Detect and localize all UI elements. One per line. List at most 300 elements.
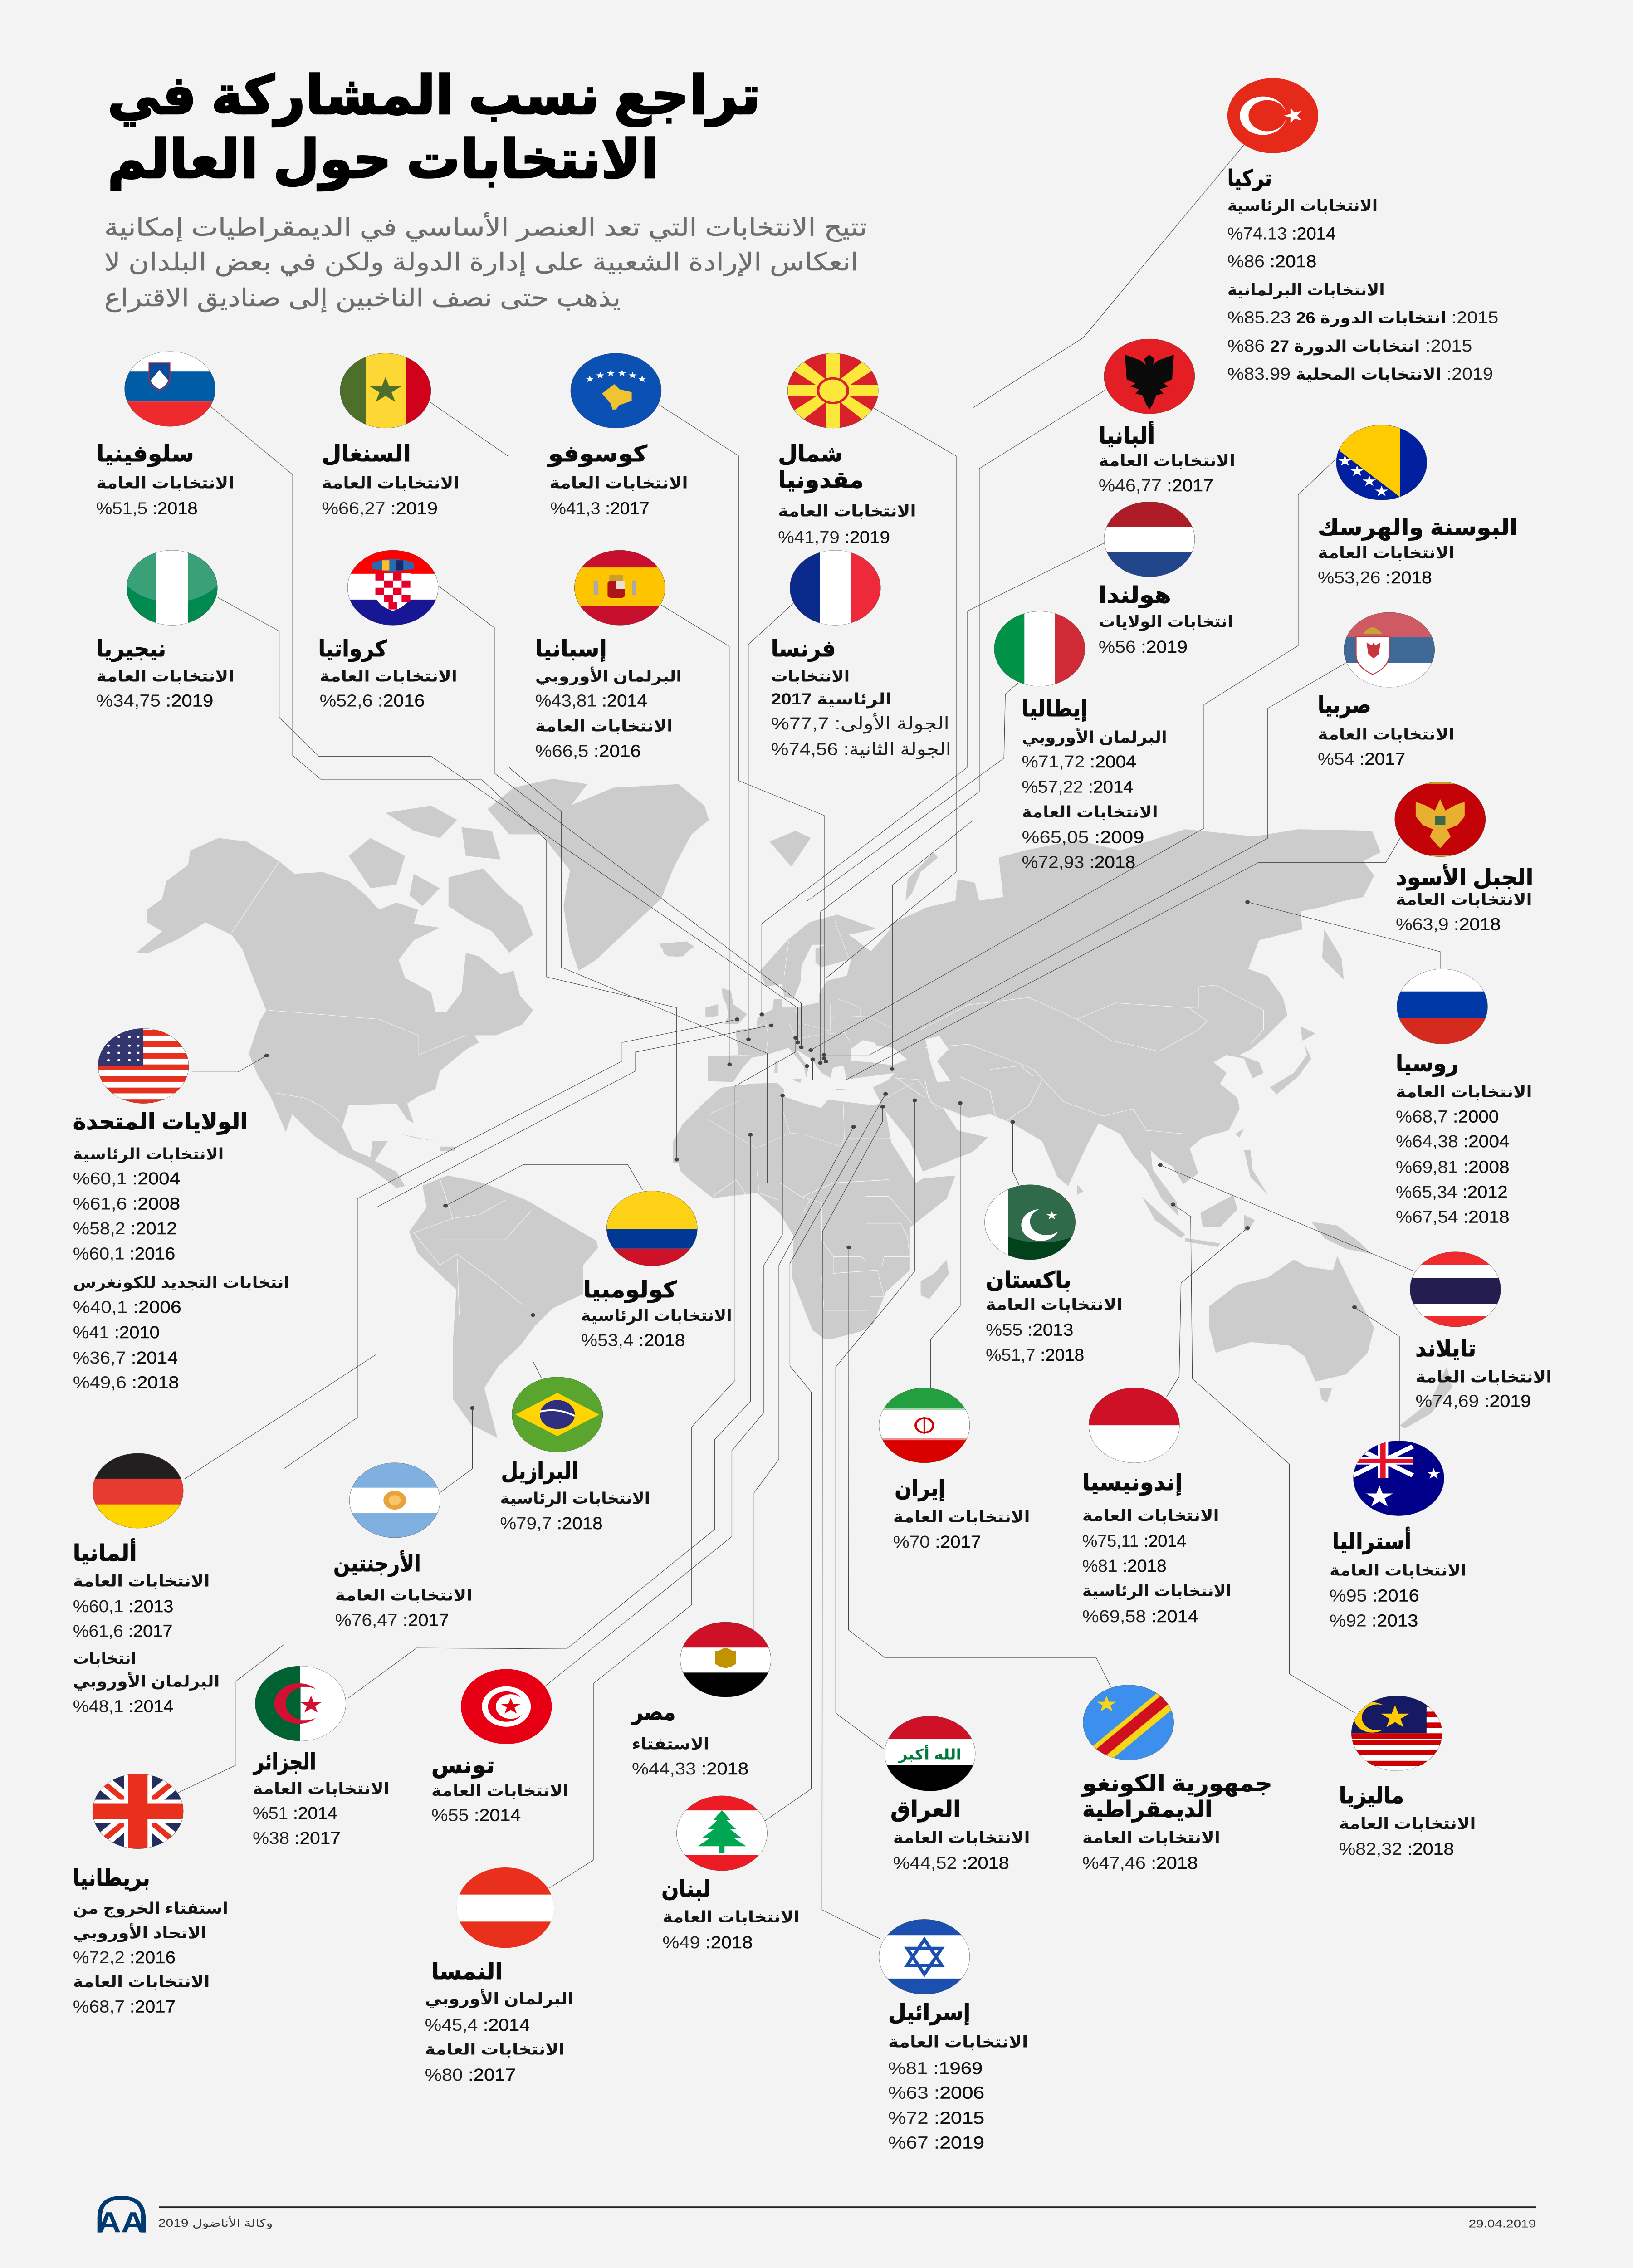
figures: 2009: %65,05 <box>1022 827 1144 846</box>
figures <box>1099 613 1233 656</box>
figures: 2008: %61,6 <box>73 1194 180 1213</box>
name: كرواتيا <box>318 636 387 662</box>
figures: 2018: %79,7 <box>500 1514 603 1533</box>
figures: الانتخابات العامة <box>253 1780 390 1798</box>
name <box>778 441 864 493</box>
country: United States <box>73 1028 289 1392</box>
name: هولندا <box>1099 582 1171 608</box>
name: الجبل الأسود <box>1396 864 1533 890</box>
leader: Montenegro <box>813 838 1400 1080</box>
figures: 2016: %72,2 <box>73 1948 176 1967</box>
country: Russia <box>1396 969 1532 1227</box>
intro text: يذهب حتى نصف الناخبين إلى صناديق الاقتراع <box>104 284 621 312</box>
figures: الجولة الأولى: ‎%77,7 <box>771 713 949 734</box>
figures: انتخابات الولايات <box>1099 613 1233 631</box>
figures <box>1099 452 1235 495</box>
flag: Australia <box>1353 1441 1444 1516</box>
name: ألمانيا <box>73 1538 137 1565</box>
figures: 2018: %47,46 <box>1082 1853 1198 1872</box>
figures: 2013: %92 <box>1330 1611 1418 1630</box>
figures: 2016: %95 <box>1330 1586 1419 1605</box>
figures: 2018: %81 <box>1082 1556 1167 1575</box>
figures: الانتخابات الرئاسية <box>500 1490 650 1508</box>
name: الولايات المتحدة <box>73 1109 248 1135</box>
flag: Egypt <box>680 1622 771 1699</box>
footer rule <box>159 2206 1536 2208</box>
leader: Netherlands <box>762 543 1104 1014</box>
figures <box>1227 197 1498 383</box>
figures: 2012: %65,34 <box>1396 1182 1508 1202</box>
figures: الانتخابات العامة <box>335 1587 472 1604</box>
country: DR Congo <box>1081 1685 1272 1872</box>
figures: 2018: %53,26 <box>1318 568 1432 587</box>
country: Tunisia <box>431 1669 569 1825</box>
figures: الانتخابات العامة <box>96 668 234 685</box>
figures: الانتخابات العامة <box>322 474 460 492</box>
figures: 2014: %45,4 <box>425 2015 530 2034</box>
name: البرازيل <box>501 1458 578 1484</box>
country: Pakistan <box>981 1173 1123 1364</box>
country: Netherlands <box>1099 502 1233 656</box>
figures <box>73 1573 220 1716</box>
figures: 2006: %40,1 <box>73 1297 181 1316</box>
name: أستراليا <box>1332 1526 1411 1554</box>
figures: الانتخابات البرلمانية <box>1227 281 1385 299</box>
flag: Pakistan <box>981 1173 1100 1260</box>
leader: Slovenia <box>210 406 676 1159</box>
figures: 2018: %67,54 <box>1396 1207 1509 1227</box>
flag: Iraq <box>885 1716 975 1791</box>
figures <box>500 1490 650 1533</box>
figures: 2014: %57,22 <box>1022 777 1133 797</box>
country: Iraq <box>885 1716 1030 1872</box>
figures: 2014: %69,58 <box>1082 1607 1198 1626</box>
figures: 2014: %74.13 <box>1227 224 1336 243</box>
figures: 2018: %49,6 <box>73 1373 179 1392</box>
leader: Iran <box>931 1103 960 1388</box>
figures: الانتخابات الرئاسية <box>1082 1582 1232 1600</box>
figures: الانتخابات الرئاسية <box>1227 197 1378 215</box>
flag: Argentina <box>349 1463 440 1538</box>
name <box>1081 1770 1272 1822</box>
figures: 2019: %74,69 <box>1416 1391 1531 1411</box>
figures: 2018: %44,33 <box>632 1759 748 1778</box>
name: سلوفينيا <box>96 441 194 467</box>
figures: 2019: %66,27 <box>322 499 438 518</box>
date: 29.04.2019 <box>1469 2218 1536 2230</box>
figures <box>431 1782 569 1825</box>
name: الجزائر <box>253 1749 316 1775</box>
figures: 2017: %46,77 <box>1099 476 1213 495</box>
leader: Tunisia <box>544 1095 782 1687</box>
figures: 2019: %41,79 <box>778 528 890 547</box>
leader: Albania <box>821 390 1106 1063</box>
flag: Serbia <box>1344 612 1435 689</box>
leader: Brazil <box>533 1315 542 1378</box>
logo: Anadolu Agency: AA <box>97 2206 145 2239</box>
figures <box>253 1780 390 1848</box>
leader: Iraq <box>836 1100 914 1749</box>
name: بريطانيا <box>73 1865 150 1891</box>
figures: 2017: %68,7 <box>73 1997 176 2016</box>
figures: 2004: %60,1 <box>73 1169 180 1188</box>
leader: Serbia <box>824 662 1347 1055</box>
flag: Montenegro <box>1395 782 1486 857</box>
figures: 2014: %51 <box>253 1804 337 1823</box>
flag: Indonesia <box>1089 1388 1180 1463</box>
country: Israel <box>879 1919 1028 2152</box>
leader: Germany <box>185 1025 771 1479</box>
figures: الانتخابات العامة <box>73 1573 210 1590</box>
figures <box>771 668 951 759</box>
figures <box>1416 1369 1552 1411</box>
leader: Spain <box>661 605 729 1065</box>
name: إيطاليا <box>1022 696 1088 722</box>
country: Croatia <box>318 550 457 710</box>
leader: Turkey <box>892 145 1244 1069</box>
figures: 2008: %69,81 <box>1396 1157 1509 1177</box>
figures: الانتخابات العامة <box>1082 1507 1219 1525</box>
leader: Argentina <box>440 1408 472 1492</box>
leader: Senegal <box>430 402 768 1183</box>
country: Bosnia and Herzegovina <box>1318 419 1518 587</box>
figures: الانتخابات العامة <box>535 718 673 735</box>
leader: Australia <box>1354 1307 1399 1441</box>
figures: الانتخابات الرئاسية <box>581 1307 732 1325</box>
country: Turkey <box>1227 78 1498 383</box>
name: إسرائيل <box>888 1999 970 2026</box>
figures <box>335 1587 472 1630</box>
figures <box>1339 1815 1476 1858</box>
figures: الجولة الثانية: ‎%74,56 <box>771 739 951 759</box>
figures: 2019: %56 <box>1099 637 1188 656</box>
leader: North Macedonia <box>826 408 956 1061</box>
flag: Algeria <box>255 1666 347 1741</box>
country: France <box>771 550 951 759</box>
figures: 2016: %60,1 <box>73 1244 175 1263</box>
leader: Indonesia <box>1167 1228 1247 1397</box>
figures: الانتخابات العامة <box>888 2033 1028 2051</box>
figures: 2014: %36,7 <box>73 1348 178 1367</box>
figures: الاتحاد الأوروبي <box>73 1923 207 1942</box>
leader: France <box>748 603 793 1040</box>
figures: 2012: %58,2 <box>73 1219 177 1238</box>
figures <box>549 474 688 518</box>
figures: 2018: %63,9 <box>1396 914 1501 934</box>
figures: 2018: %72,93 <box>1022 852 1135 872</box>
figures: انتخابات التجديد للكونغرس <box>73 1274 289 1292</box>
figures <box>986 1296 1123 1364</box>
name: باكستان <box>986 1267 1071 1292</box>
country: Serbia <box>1318 612 1454 768</box>
leader: Lebanon <box>765 1094 885 1821</box>
flag: Israel <box>879 1919 970 1994</box>
figures: 2018: %49 <box>662 1933 753 1952</box>
figures: الانتخابات العامة <box>1022 803 1158 821</box>
leader: Russia <box>1247 902 1440 969</box>
agency credit: وكالة الأناضول 2019 <box>158 2216 273 2229</box>
leader: Israel <box>822 1107 883 1939</box>
country: Argentina <box>333 1463 472 1630</box>
figures <box>73 1900 228 2016</box>
flag: Spain <box>574 550 665 626</box>
figures: الرئاسية 2017 <box>771 690 892 709</box>
figures <box>1082 1507 1232 1626</box>
name: فرنسا <box>771 636 836 662</box>
flag: Germany <box>93 1453 183 1529</box>
figures: 2014: %55 <box>431 1805 521 1825</box>
figures <box>1330 1562 1467 1630</box>
figures <box>778 503 916 547</box>
name: كولومبيا <box>583 1277 677 1303</box>
title: الانتخابات حول العالم <box>108 129 659 191</box>
figures: 2017: %80 <box>425 2065 516 2084</box>
intro text: انعكاس الإرادة الشعبية على إدارة الدولة ولكن في بعض البلدان لا <box>104 248 859 277</box>
figures: الانتخابات العامة <box>1339 1815 1476 1833</box>
name: لبنان <box>661 1876 711 1901</box>
figures <box>96 668 234 710</box>
figures: الانتخابات العامة <box>96 474 234 492</box>
figures <box>1396 1083 1532 1227</box>
figures: البرلمان الأوروبي <box>73 1671 220 1691</box>
figures: 2010: %41 <box>73 1323 160 1342</box>
name: صربيا <box>1318 692 1371 718</box>
name: مقدونيا <box>778 467 864 493</box>
figures: 2016: %66,5 <box>535 741 641 760</box>
flag: Brazil <box>512 1377 603 1452</box>
leader: Italy <box>807 683 1018 1066</box>
figures: الانتخابات العامة <box>1416 1369 1552 1386</box>
figures: الانتخابات العامة <box>320 668 457 685</box>
title: تراجع نسب المشاركة في <box>108 65 761 127</box>
country: Egypt <box>631 1622 771 1778</box>
country: Slovenia <box>96 352 234 518</box>
flag: USA <box>98 1028 189 1105</box>
country: Albania <box>1099 339 1235 495</box>
figures: الانتخابات الرئاسية <box>73 1145 224 1163</box>
country: Iran <box>879 1388 1030 1551</box>
flag: DR Congo <box>1083 1685 1184 1769</box>
figures: البرلمان الأوروبي <box>425 1989 573 2009</box>
figures: الانتخابات العامة <box>1318 726 1454 743</box>
name: مصر <box>631 1700 675 1725</box>
name: ألبانيا <box>1099 421 1155 448</box>
country: Montenegro <box>1395 782 1533 934</box>
country: Colombia <box>581 1191 732 1349</box>
country: Malaysia <box>1339 1696 1476 1858</box>
country: Italy <box>994 611 1167 872</box>
leader: Bosnia <box>811 459 1336 1050</box>
map location dots <box>264 900 1357 1410</box>
figures: انتخابات <box>73 1650 137 1667</box>
leader: Egypt <box>754 1127 854 1630</box>
figures <box>320 668 457 710</box>
figures: 2018: %44,52 <box>893 1853 1009 1872</box>
figures: 2014: %75,11 <box>1082 1531 1186 1550</box>
name: جمهورية الكونغو <box>1081 1770 1272 1797</box>
leader: Austria <box>549 1038 796 1888</box>
figures <box>1082 1829 1220 1872</box>
figures: 2019: %67 <box>888 2133 984 2152</box>
figures: 2017: %54 <box>1318 749 1405 768</box>
figures: الانتخابات العامة <box>431 1782 569 1800</box>
flag: Colombia <box>606 1191 698 1267</box>
figures <box>96 474 234 518</box>
flag: Senegal <box>340 353 432 428</box>
figures: 2014: %48,1 <box>73 1696 173 1716</box>
figures <box>535 666 682 760</box>
figures <box>1318 544 1454 587</box>
figures: استفتاء الخروج من <box>73 1900 228 1918</box>
figures: البرلمان الأوروبي <box>1022 727 1167 747</box>
figures: الانتخابات <box>771 668 850 685</box>
figures <box>322 474 460 518</box>
figures <box>632 1735 748 1778</box>
name: إيران <box>895 1476 945 1501</box>
figures: الانتخابات العامة <box>73 1973 210 1990</box>
flag: Iraq: الله أكبر <box>898 1745 962 1763</box>
figures: الاستفتاء <box>632 1735 709 1753</box>
figures: 2016: %52,6 <box>320 691 425 710</box>
figures: 2004: %71,72 <box>1022 752 1136 771</box>
figures: 2018: %86 <box>1227 252 1316 271</box>
country: Nigeria <box>96 533 234 710</box>
leader: DRC <box>849 1247 1111 1687</box>
figures: 2017: %61,6 <box>73 1621 172 1640</box>
country: Lebanon <box>661 1796 800 1952</box>
name: الأرجنتين <box>333 1550 421 1577</box>
figures <box>893 1829 1030 1872</box>
figures: 2018: %82,32 <box>1339 1839 1454 1858</box>
world map <box>136 779 1452 1438</box>
country: Australia <box>1330 1441 1467 1630</box>
flag: Lebanon <box>676 1796 768 1871</box>
figures: الانتخابات العامة <box>1396 1083 1532 1101</box>
figures <box>1396 891 1532 934</box>
figures: 2017: %41,3 <box>550 499 650 518</box>
figures: 2006: %63 <box>888 2083 984 2102</box>
flag: Malaysia <box>1351 1696 1442 1771</box>
figures: 2004: %64,38 <box>1396 1132 1509 1151</box>
name: السنغال <box>322 441 411 466</box>
name: البوسنة والهرسك <box>1318 514 1518 541</box>
leader: Pakistan <box>1012 1122 1019 1185</box>
figures: الانتخابات العامة <box>549 474 688 492</box>
flag: North Macedonia <box>781 347 885 434</box>
figures: 2018: %53,4 <box>581 1330 685 1349</box>
figures: 2017: %38 <box>253 1828 341 1848</box>
leader: USA <box>192 1056 267 1072</box>
leader: Algeria <box>348 1135 750 1698</box>
country: Austria <box>425 1867 573 2084</box>
country: United Kingdom <box>73 1774 228 2016</box>
figures: 2015: %72 <box>888 2108 984 2127</box>
figures: الانتخابات العامة <box>425 2041 565 2058</box>
flag: Thailand <box>1410 1251 1501 1327</box>
flag: Turkey <box>1227 78 1318 153</box>
country: Thailand <box>1410 1251 1552 1411</box>
flag: Tunisia <box>461 1669 552 1744</box>
name: نيجيريا <box>96 636 166 662</box>
country: Algeria <box>253 1666 390 1848</box>
flag: Netherlands <box>1104 502 1195 577</box>
name: إندونيسيا <box>1082 1470 1183 1496</box>
flag: Italy <box>994 611 1085 686</box>
title <box>108 65 761 191</box>
name: روسيا <box>1396 1051 1459 1077</box>
name: تركيا <box>1227 166 1272 191</box>
name: شمال <box>778 441 843 466</box>
leader: Kosovo <box>659 405 824 1058</box>
country: North Macedonia <box>778 347 916 547</box>
figures: 2000: %68,7 <box>1396 1107 1499 1126</box>
figures: 2015: انتخابات الدورة 27 ‎%86 <box>1227 336 1472 356</box>
name: الديمقراطية <box>1082 1796 1213 1822</box>
leader: Colombia <box>445 1164 642 1206</box>
flag: Russia <box>1397 969 1488 1044</box>
figures: 2018: %51,5 <box>96 499 198 518</box>
flag: Croatia <box>347 550 438 626</box>
figures <box>581 1307 732 1349</box>
name: النمسا <box>431 1959 503 1984</box>
leader: Nigeria <box>218 597 797 1042</box>
figures <box>1318 726 1454 768</box>
flag: Iran <box>879 1388 970 1464</box>
flag: France <box>790 550 882 626</box>
figures: الانتخابات العامة <box>778 503 916 520</box>
country: Indonesia <box>1082 1388 1232 1626</box>
figures: 2018: %51,7 <box>986 1345 1084 1364</box>
figures <box>73 1145 289 1392</box>
figures <box>888 2033 1028 2152</box>
figures: الانتخابات العامة <box>1396 891 1532 909</box>
name: إسبانيا <box>535 636 607 662</box>
figures: الانتخابات العامة <box>1099 452 1235 470</box>
figures: الانتخابات العامة <box>1330 1562 1467 1579</box>
flag: Albania <box>1104 339 1195 414</box>
country: Brazil <box>500 1377 650 1533</box>
leader: Thailand <box>1160 1165 1414 1271</box>
figures: 2014: %43,81 <box>535 691 647 710</box>
figures: الانتخابات العامة <box>893 1508 1030 1526</box>
figures: 2017: %76,47 <box>335 1610 449 1630</box>
flag: Slovenia <box>124 352 215 428</box>
flag: Austria <box>457 1867 554 1948</box>
figures <box>662 1908 800 1952</box>
figures <box>893 1508 1030 1551</box>
leader: Malaysia <box>1173 1205 1355 1713</box>
figures <box>1022 727 1167 872</box>
figures: الانتخابات العامة <box>893 1829 1030 1847</box>
country: Senegal <box>322 353 460 518</box>
flag: Bosnia <box>1336 419 1427 500</box>
intro text: تتيح الانتخابات التي تعد العنصر الأساسي في الديمقراطيات إمكانية <box>104 212 867 242</box>
flag: Kosovo <box>571 353 661 428</box>
figures <box>425 1989 573 2084</box>
flag: Nigeria <box>120 533 225 626</box>
figures: 2013: %55 <box>986 1320 1073 1339</box>
figures: 2019: %34,75 <box>96 691 213 710</box>
figures: 2017: %70 <box>893 1532 981 1551</box>
name: ماليزيا <box>1339 1783 1404 1809</box>
country: Germany <box>73 1453 220 1716</box>
figures: 1969: %81 <box>888 2058 983 2078</box>
figures: الانتخابات العامة <box>1082 1829 1220 1847</box>
figures: الانتخابات العامة <box>1318 544 1454 562</box>
name: تايلاند <box>1415 1336 1476 1361</box>
flag: UK <box>93 1774 183 1849</box>
leader: UK <box>177 1019 737 1793</box>
